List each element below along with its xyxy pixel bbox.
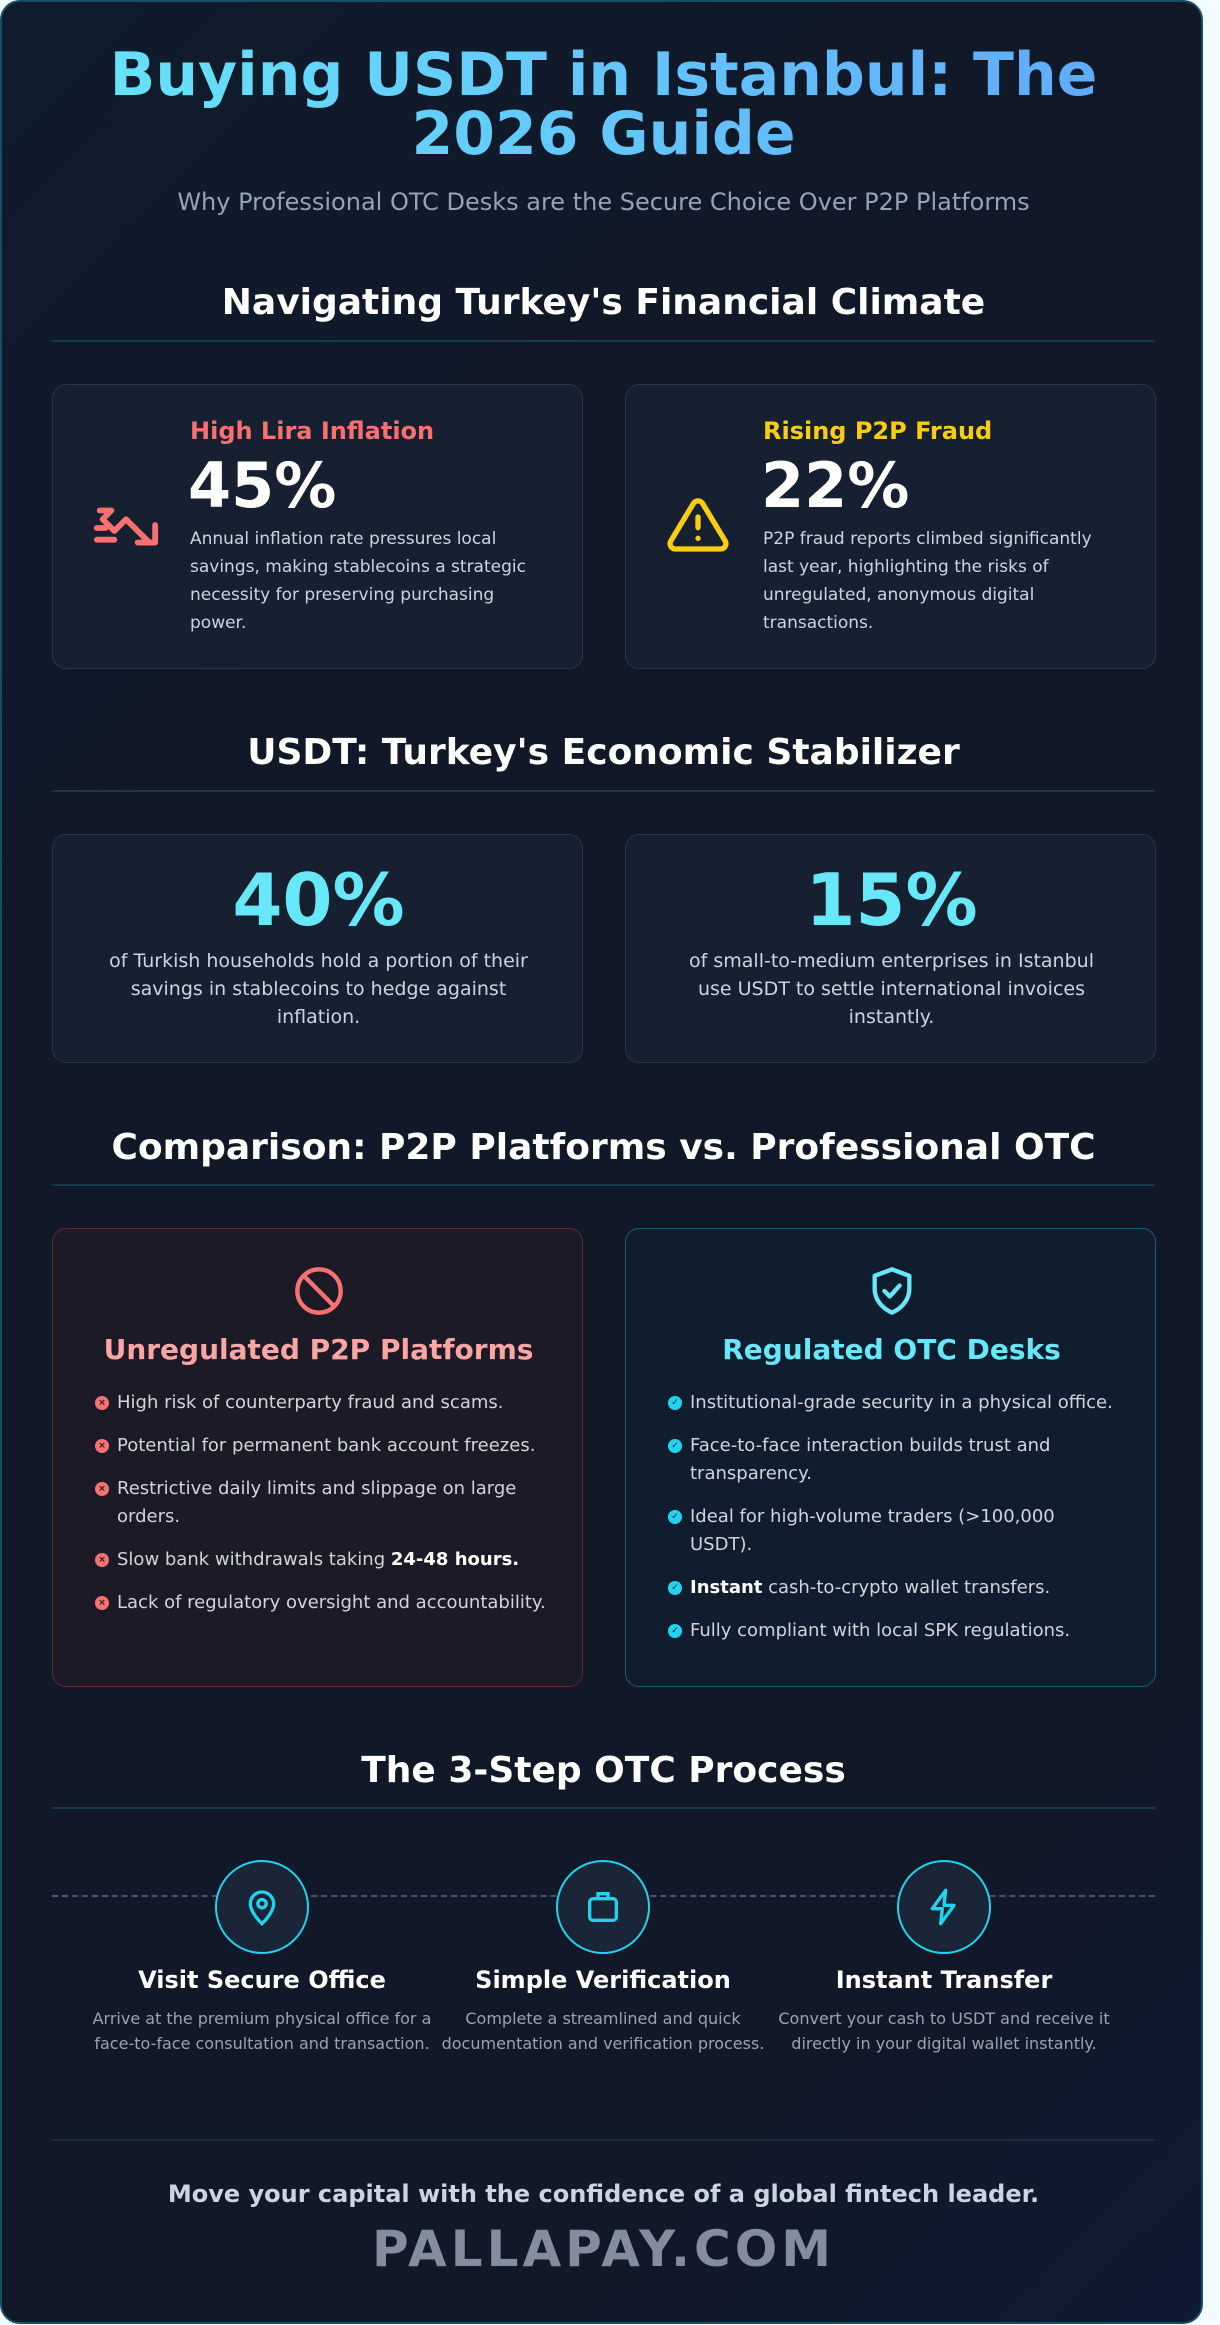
list: p2p risks [95, 1392, 546, 1613]
dashed connector [52, 1895, 1155, 1897]
footer tagline: Move your capital with the confidence of a global fintech leader. [168, 2180, 1039, 2208]
title [2, 46, 1205, 164]
description: P2P fraud reports climbed significantly last year, highlighting the risks of unregulated, anonymous digital transactions. [763, 529, 1092, 633]
panel: 15% SMEs [625, 834, 1156, 1063]
description: Annual inflation rate pressures local savings, making stablecoins a strategic necessity for preserving purchasing power. [190, 529, 526, 633]
step title: Simple Verification [475, 1966, 731, 1994]
panel: regulated otc [625, 1228, 1156, 1687]
list: p2p risks: Restrictive daily limits and slippage on large orders. [117, 1478, 516, 1527]
title: Buying USDT in Istanbul: The [110, 40, 1097, 110]
step 1: visit office [92, 1860, 431, 2053]
icon: location pin [215, 1860, 309, 1954]
list: p2p risks: Slow bank withdrawals taking 24-48 hours. [117, 1549, 519, 1570]
heading: financial climate: Navigating Turkey's Financial Climate [222, 282, 985, 323]
panel: unregulated p2p [52, 1228, 583, 1687]
icon: lightning [897, 1860, 991, 1954]
step 3: transfer [778, 1860, 1110, 2053]
description: of Turkish households hold a portion of their savings in stablecoins to hedge against inflation. [109, 950, 528, 1028]
stat: 15% [805, 858, 978, 942]
heading: stabilizer: USDT: Turkey's Economic Stabilizer [247, 732, 960, 773]
step description: Arrive at the premium physical office for a face-to-face consultation and transaction. [93, 2009, 431, 2053]
panel: unregulated p2p: × [98, 1555, 106, 1565]
icon: shield check [872, 1267, 912, 1315]
stat: 22% [761, 449, 909, 522]
icon: briefcase [556, 1860, 650, 1954]
stat: 45% [188, 449, 336, 522]
icon: prohibited [295, 1267, 343, 1315]
panel: unregulated p2p: × [98, 1441, 106, 1451]
list: otc benefits: Ideal for high-volume traders (>100,000 USDT). [690, 1506, 1055, 1555]
panel: unregulated p2p: × [98, 1398, 106, 1408]
panel: regulated otc: ✓ [671, 1441, 679, 1451]
label: Rising P2P Fraud [763, 417, 992, 445]
footer brand: PALLAPAY.COM [372, 2220, 835, 2278]
description: of small-to-medium enterprises in Istanbul use USDT to settle international invoices instantly. [689, 950, 1094, 1028]
step title: Visit Secure Office [138, 1966, 386, 1994]
panel: regulated otc: ✓ [671, 1626, 679, 1636]
panel: unregulated p2p: × [98, 1598, 106, 1608]
panel: regulated otc: ✓ [671, 1512, 679, 1522]
panel: unregulated p2p: × [98, 1484, 106, 1494]
list: otc benefits: Fully compliant with local SPK regulations. [690, 1620, 1070, 1641]
stat: 40% [232, 858, 405, 942]
panel title: Unregulated P2P Platforms [104, 1333, 533, 1366]
step description: Convert your cash to USDT and receive it directly in your digital wallet instantly. [778, 2009, 1110, 2053]
subtitle: Why Professional OTC Desks are the Secure Choice Over P2P Platforms [177, 188, 1030, 216]
step description: Complete a streamlined and quick documentation and verification process. [442, 2009, 764, 2053]
heading: process: The 3-Step OTC Process [361, 1750, 846, 1791]
icon: trending down [94, 508, 158, 546]
label: High Lira Inflation [190, 417, 434, 445]
list: p2p risks: Potential for permanent bank account freezes. [117, 1435, 535, 1456]
list: otc benefits: Institutional-grade security in a physical office. [690, 1392, 1113, 1413]
icon: warning [667, 498, 729, 552]
panel title: Regulated OTC Desks [722, 1333, 1061, 1366]
panel: p2p fraud [625, 384, 1156, 669]
step title: Instant Transfer [836, 1966, 1052, 1994]
panel: regulated otc: ✓ [671, 1583, 679, 1593]
list: p2p risks: High risk of counterparty fraud and scams. [117, 1392, 503, 1413]
heading: comparison: Comparison: P2P Platforms vs. Professional OTC [111, 1127, 1096, 1168]
panel: regulated otc: ✓ [671, 1398, 679, 1408]
list: otc benefits: Instant cash-to-crypto wallet transfers. [690, 1577, 1050, 1598]
list: otc benefits: Face-to-face interaction builds trust and transparency. [690, 1435, 1050, 1484]
list: p2p risks: Lack of regulatory oversight and accountability. [117, 1592, 546, 1613]
title: 2026 Guide [411, 99, 796, 169]
step 2: verification [442, 1860, 764, 2053]
list: otc benefits [668, 1392, 1113, 1641]
panel: high lira inflation [52, 384, 583, 669]
panel: 40% households [52, 834, 583, 1063]
